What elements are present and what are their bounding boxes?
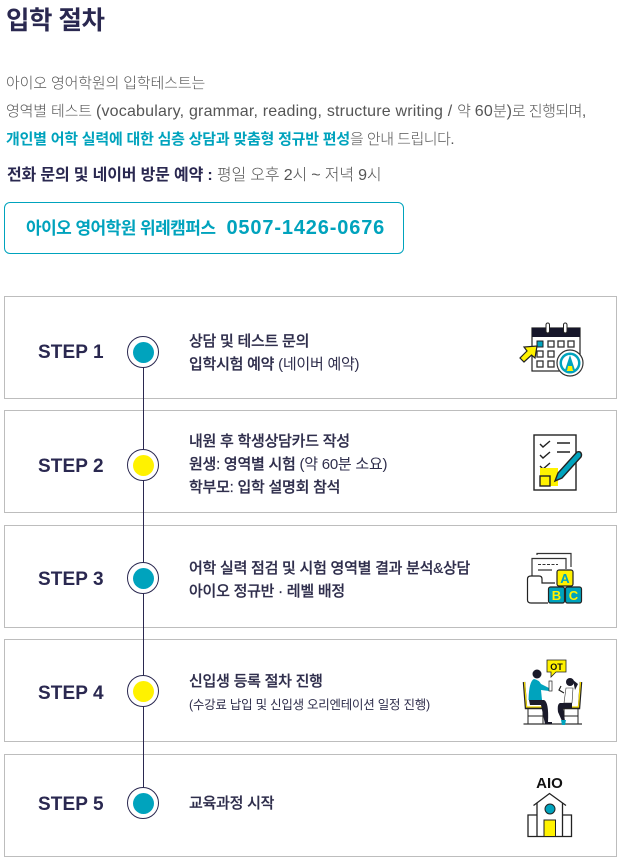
- panel: step 2: [4, 410, 617, 513]
- step 5 description: 교육과정 시작: [189, 795, 274, 812]
- step 4 description: 신입생 등록 절차 진행: [189, 673, 323, 690]
- step 3 label: STEP 3: [38, 569, 104, 590]
- step 5 marker: [127, 787, 159, 819]
- icon: one-to-one orientation: OT: [550, 662, 563, 672]
- step 1 marker: [127, 336, 159, 368]
- intro text block: 아이오 영어학원의 입학테스트는: [6, 75, 205, 92]
- panel: step 3: [4, 525, 617, 628]
- panel: step 5: [4, 754, 617, 857]
- step 1 description: [189, 333, 359, 373]
- step 2 label: STEP 2: [38, 456, 104, 477]
- step 4 marker: [127, 675, 159, 707]
- step 2 description: [189, 433, 387, 496]
- timeline line: [142, 351, 144, 803]
- step 2 marker: [127, 449, 159, 481]
- step 1 description: 입학시험 예약 (네이버 예약): [189, 356, 359, 373]
- step 2 description: 내원 후 학생상담카드 작성: [189, 433, 350, 450]
- intro text block: 영역별 테스트 (vocabulary, grammar, reading, structure writing / 약 60분)로 진행되며,: [6, 103, 586, 120]
- icon: folder and ABC blocks: C: [569, 588, 579, 603]
- step 3 description: 아이오 정규반 · 레벨 배정: [189, 583, 345, 600]
- step 4 label: STEP 4: [38, 683, 104, 704]
- step 1 description: 상담 및 테스트 문의: [189, 333, 309, 350]
- icon: folder and ABC blocks: A: [560, 571, 570, 586]
- icon: folder and ABC blocks: B: [552, 588, 561, 603]
- title: 입학 절차: [6, 7, 104, 35]
- step 5 label: STEP 5: [38, 794, 104, 815]
- intro text block: [6, 75, 586, 148]
- contact button: 아이오 영어학원 위례캠퍼스 0507-1426-0676: [26, 217, 385, 239]
- step 1 label: STEP 1: [38, 342, 104, 363]
- step 2 description: 학부모: 입학 설명회 참석: [189, 479, 340, 496]
- step 3 description: 어학 실력 점검 및 시험 영역별 결과 분석&상담: [189, 560, 470, 577]
- panel: step 1: [4, 296, 617, 399]
- panel: step 4: [4, 639, 617, 742]
- contact button: [4, 202, 404, 254]
- step 3 marker: [127, 562, 159, 594]
- step 3 description: [189, 560, 470, 600]
- icon: AIO school building: AIO: [536, 775, 563, 792]
- step 4 description: (수강료 납입 및 신입생 오리엔테이션 일정 진행): [189, 698, 430, 712]
- step 4 description: [189, 673, 430, 712]
- intro text block: 개인별 어학 실력에 대한 심층 상담과 맞춤형 정규반 편성을 안내 드립니다.: [6, 131, 454, 148]
- step 2 description: 원생: 영역별 시험 (약 60분 소요): [189, 456, 387, 473]
- phone and visit hours: 전화 문의 및 네이버 방문 예약 : 평일 오후 2시 ~ 저녁 9시: [7, 167, 381, 184]
